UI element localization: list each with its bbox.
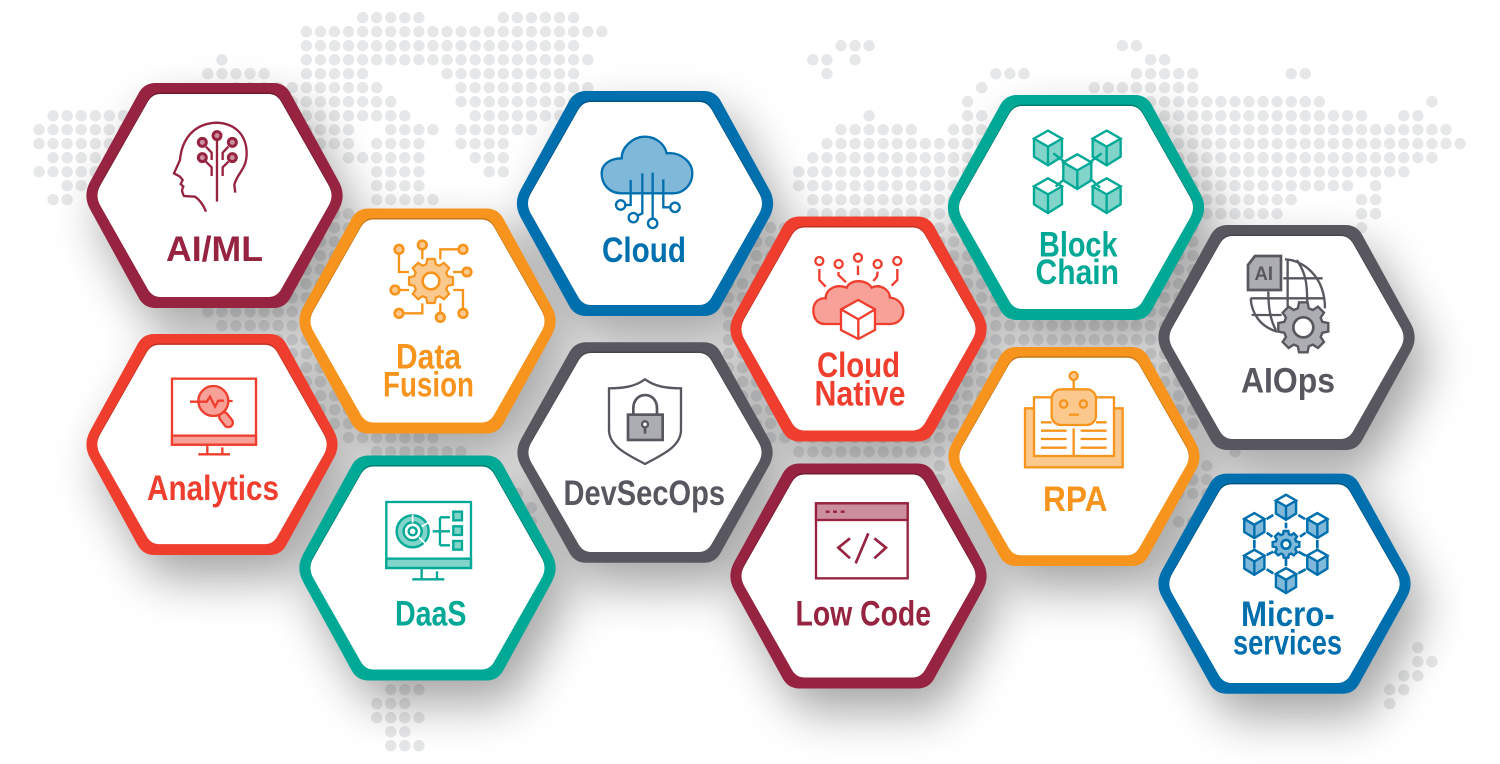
label: Data Fusion: Fusion: [383, 366, 474, 405]
icon: AI chip, globe and gear: [1248, 256, 1328, 352]
icon: cloud with cube: [813, 254, 903, 339]
panel: DaaS: [299, 456, 556, 680]
panel: Cloud: [517, 91, 773, 316]
label: Microservices: [1233, 595, 1342, 662]
panel: Low Code: [730, 464, 987, 688]
panel: Analytics: [86, 334, 338, 555]
label: Low Code: Low Code: [796, 594, 931, 634]
label: Microservices: Micro-: [1241, 595, 1335, 634]
label: Microservices: services: [1233, 624, 1342, 662]
label: Data Fusion: Data: [396, 338, 461, 377]
panel: Microservices: [1158, 474, 1411, 694]
icon: monitor with magnifier: [172, 379, 256, 454]
label: Block Chain: [1036, 226, 1119, 292]
panel: DevSecOps: [517, 342, 773, 563]
panel: AIOps: [1158, 225, 1415, 450]
icon: monitor with dashboard: [386, 502, 471, 579]
icon: shield with padlock: [609, 379, 681, 464]
label: DevSecOps: DevSecOps: [564, 474, 725, 513]
label: Block Chain: Block: [1039, 226, 1118, 264]
icon: gear with connected cubes: [1244, 495, 1327, 593]
icon: robot reading book: [1025, 372, 1123, 467]
label: AIOps: AIOps: [1241, 362, 1335, 400]
label: Data Fusion: [383, 338, 474, 405]
panel: RPA: [948, 347, 1200, 566]
label: Cloud: Cloud: [602, 231, 686, 270]
label: RPA: RPA: [1043, 480, 1108, 519]
label: Analytics: Analytics: [147, 469, 279, 508]
label: Block Chain: Chain: [1036, 253, 1119, 292]
icon: linked blocks: [1034, 131, 1121, 213]
label: Cloud Native: [814, 346, 906, 414]
panel: Cloud Native: [730, 216, 987, 442]
label: Cloud Native: Cloud: [817, 346, 900, 385]
panel: Block Chain: [948, 95, 1204, 320]
label: Cloud Native: Native: [814, 375, 906, 414]
label: AI/ML: AI/ML: [166, 230, 263, 269]
icon: cloud with circuits: [602, 137, 692, 228]
icon: gear with circuits: [391, 241, 471, 322]
label: DaaS: DaaS: [395, 594, 466, 634]
icon: head with circuit brain: [174, 123, 247, 212]
panel: Data Fusion: [299, 208, 556, 434]
text: AI chip label: AI: [1254, 264, 1273, 285]
icon: code window: [816, 503, 908, 578]
soft drop shadows: [99, 106, 1427, 717]
panel: AI/ML: [86, 83, 343, 308]
